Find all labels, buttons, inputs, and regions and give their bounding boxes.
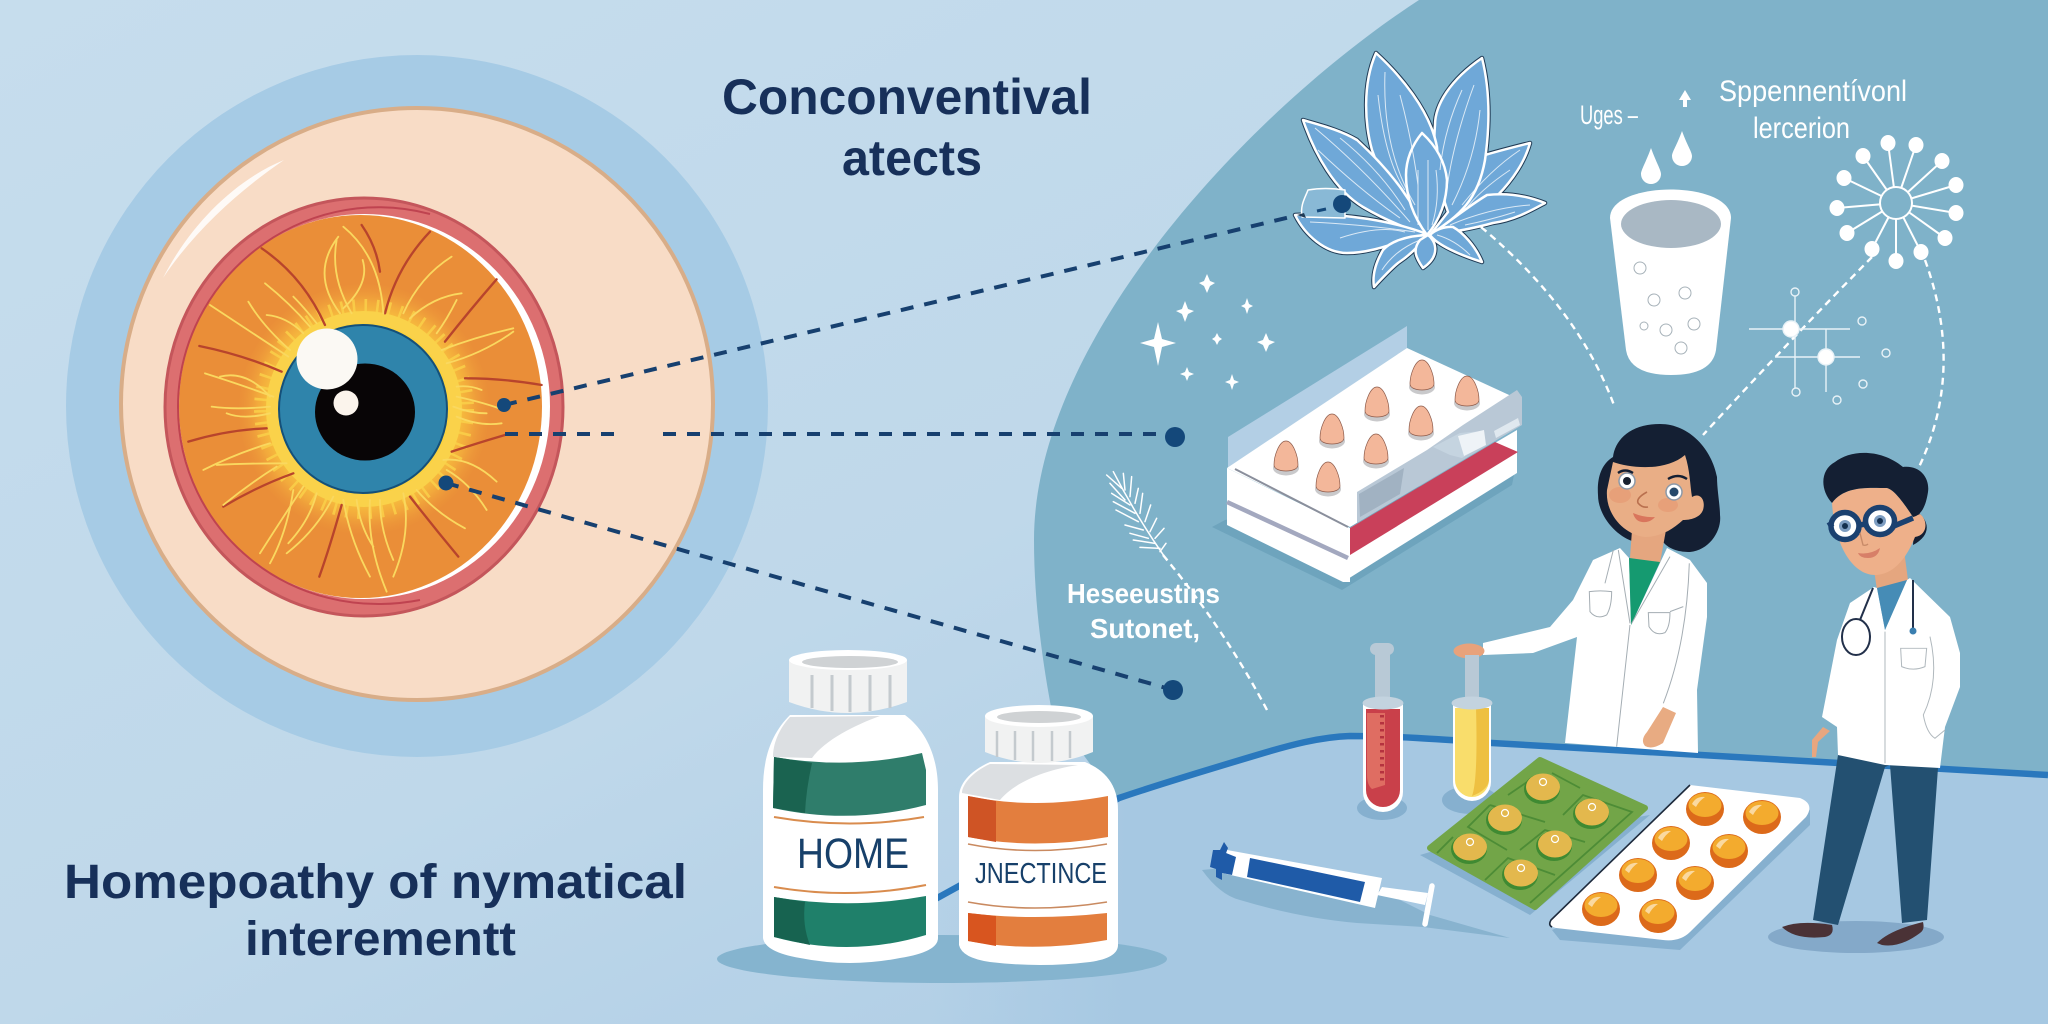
- cell grooves: [1437, 773, 1632, 903]
- dashed leader lines: [446, 214, 1303, 690]
- box top face: [1227, 348, 1520, 527]
- iris glow: [239, 284, 489, 534]
- face: [1832, 488, 1925, 575]
- band shade: [968, 913, 996, 946]
- title: homeopathy: Homepoathy of nymatical: [64, 856, 687, 909]
- icon: yellow test tube: [1442, 655, 1498, 814]
- silver blister tray: [1357, 390, 1522, 523]
- label lines: [774, 817, 926, 893]
- blue iris: [279, 325, 447, 493]
- nose: [1860, 533, 1868, 545]
- bottle body: [959, 762, 1118, 965]
- forearm: [1643, 707, 1676, 747]
- icon: red test tube: [1357, 643, 1407, 820]
- icon: white cup: [1610, 190, 1731, 375]
- icon: green blister pack: [1420, 760, 1650, 915]
- collar: [1362, 696, 1404, 710]
- icon: droplets: [1641, 131, 1692, 184]
- icon: orange blister pack: [1550, 785, 1810, 950]
- cap ridges: [997, 731, 1070, 761]
- label: heseeustins: Sutonet,: [1090, 613, 1200, 644]
- small bud with dot: [1297, 188, 1351, 218]
- cap ridges: [812, 675, 890, 712]
- label: spennentivonl: lercerion: [1753, 112, 1850, 145]
- white barrel: [1222, 850, 1382, 908]
- shadow: [1768, 921, 1944, 953]
- white crescent: [179, 214, 550, 599]
- icon: small up arrow: [1679, 90, 1691, 107]
- pills: [1451, 774, 1609, 890]
- band shade: [968, 796, 996, 842]
- title: homeopathy: interementt: [245, 913, 516, 966]
- card edge: [1550, 785, 1690, 927]
- green band bottom: [774, 896, 926, 947]
- shoes: [1782, 923, 1833, 938]
- home text: HOME: [797, 830, 909, 878]
- eye illustration: [66, 55, 768, 757]
- dark red veins: [188, 225, 542, 577]
- nose: [1638, 492, 1648, 507]
- petal veins: [1310, 72, 1530, 270]
- orange iris field: [179, 215, 542, 598]
- stopper stem: [1465, 655, 1479, 702]
- cap inset: [997, 711, 1081, 723]
- tray tab: [1494, 418, 1520, 438]
- tray latch: [1433, 431, 1484, 458]
- icon: feather: [1107, 472, 1166, 555]
- mouth: [1858, 548, 1880, 558]
- tube shadow: [1442, 786, 1498, 814]
- glasses: [1829, 508, 1913, 540]
- band shade: [774, 897, 810, 945]
- icon: constellation: [1749, 288, 1890, 404]
- shoulder shade: [773, 716, 880, 758]
- green band top: [773, 753, 926, 816]
- label: heseeustins: Heseeustins: [1067, 578, 1220, 609]
- liquid highlight: [1367, 713, 1385, 789]
- label: spennentivonl: Sppennentívonl: [1719, 75, 1907, 108]
- pupil: [315, 364, 415, 460]
- liquid shade: [1472, 708, 1489, 796]
- icon: syringe: [1202, 842, 1510, 938]
- cap: [985, 716, 1093, 763]
- pills: [1582, 792, 1781, 933]
- person: male doctor: [1768, 453, 1960, 953]
- leader dots: [438, 398, 1185, 700]
- cap: [789, 660, 907, 713]
- cap top: [789, 650, 907, 670]
- bottle ground shadow: [717, 935, 1167, 983]
- pack shadow: [1552, 810, 1810, 950]
- hair: [1598, 424, 1720, 552]
- title: homeopathy: [64, 856, 687, 966]
- coat lines and pockets: [1589, 550, 1689, 747]
- yellow liquid: [1455, 708, 1489, 797]
- box right face: [1343, 430, 1517, 582]
- pupils: [1839, 515, 1886, 532]
- eyeball highlight: [163, 160, 284, 278]
- blue fluid: [1247, 858, 1365, 902]
- hand: [1812, 727, 1830, 757]
- lab coat: [1483, 548, 1707, 753]
- blue plunger: [1210, 842, 1236, 880]
- icon: lotus plant: [1295, 53, 1545, 287]
- silver panel: [1359, 468, 1404, 517]
- egg pills: [1273, 360, 1480, 496]
- cheeks: [1609, 487, 1678, 512]
- yellow iris fibres: [203, 227, 513, 592]
- icon: pill box: [1212, 326, 1522, 590]
- hair: [1823, 453, 1928, 517]
- glass tube: [1363, 702, 1403, 812]
- tube shadow: [1357, 796, 1407, 820]
- box seams: [1227, 469, 1348, 558]
- tray latch highlight: [1458, 430, 1486, 456]
- title: conventional: atects: [842, 130, 982, 186]
- panel: table surface with blue edge: [930, 736, 2048, 1024]
- cap inset: [802, 656, 898, 668]
- red strip: [1350, 442, 1518, 555]
- stethoscope: [1842, 580, 1916, 655]
- icon: sparkles: [1140, 274, 1275, 390]
- bottle body: [763, 715, 938, 963]
- stopper cap: [1370, 643, 1394, 655]
- spiky halo: [264, 309, 464, 509]
- title: conventional: [722, 69, 1092, 186]
- flange: [1425, 886, 1432, 924]
- label lines: [968, 844, 1107, 908]
- green shirt: [1629, 558, 1660, 625]
- tick marks: [1380, 715, 1384, 785]
- green card: [1430, 760, 1645, 907]
- dotted connectors: [1163, 227, 1944, 710]
- back hair: [1913, 510, 1927, 545]
- label: uges: Uges –: [1580, 100, 1638, 130]
- blue shirt: [1877, 580, 1907, 630]
- white card: [1550, 785, 1809, 940]
- label: heseeustins: [1067, 578, 1220, 644]
- orange band top: [968, 796, 1108, 844]
- panel: teal treatment area: [1034, 0, 2048, 802]
- red ring: [165, 198, 563, 616]
- mouth: [1633, 513, 1655, 522]
- peach eyeball: [121, 108, 713, 700]
- eyes: [1618, 470, 1687, 500]
- label: spennentivonl: [1719, 75, 1907, 145]
- title: conventional: Conconventival: [722, 69, 1092, 125]
- ring inner edge: [178, 207, 430, 604]
- orange band bottom: [968, 913, 1107, 947]
- shoulder shade: [962, 764, 1078, 800]
- syringe shadow: [1202, 868, 1510, 938]
- cap top: [985, 705, 1093, 727]
- glass tube: [1453, 702, 1491, 801]
- jnectince text: JNECTINCE: [975, 858, 1107, 890]
- trousers: [1813, 755, 1938, 925]
- lotus petals: [1295, 53, 1545, 287]
- coat lines: [1885, 632, 1945, 763]
- bottle: jnectince: [959, 705, 1118, 965]
- outer blue halo: [66, 55, 768, 757]
- person: female doctor: [1454, 424, 1720, 753]
- face: [1607, 455, 1704, 537]
- band shade: [773, 757, 812, 813]
- collar: [1452, 696, 1492, 710]
- neck: [1630, 530, 1666, 563]
- stopper stem: [1375, 652, 1390, 702]
- box shadow: [1212, 470, 1515, 590]
- bottle: home: [763, 650, 938, 963]
- lab coat: [1822, 578, 1960, 768]
- needle hub: [1377, 887, 1428, 905]
- neck: [1874, 550, 1908, 590]
- box front-left face: [1227, 468, 1350, 582]
- large eye highlight: [296, 328, 358, 390]
- red liquid: [1366, 709, 1400, 807]
- pack shadow: [1420, 815, 1650, 915]
- lotus outline: [1295, 53, 1545, 287]
- blue lid: [1228, 326, 1407, 468]
- small eye highlight: [334, 390, 358, 416]
- icon: molecule network: [1830, 135, 1964, 269]
- hand: [1454, 644, 1484, 658]
